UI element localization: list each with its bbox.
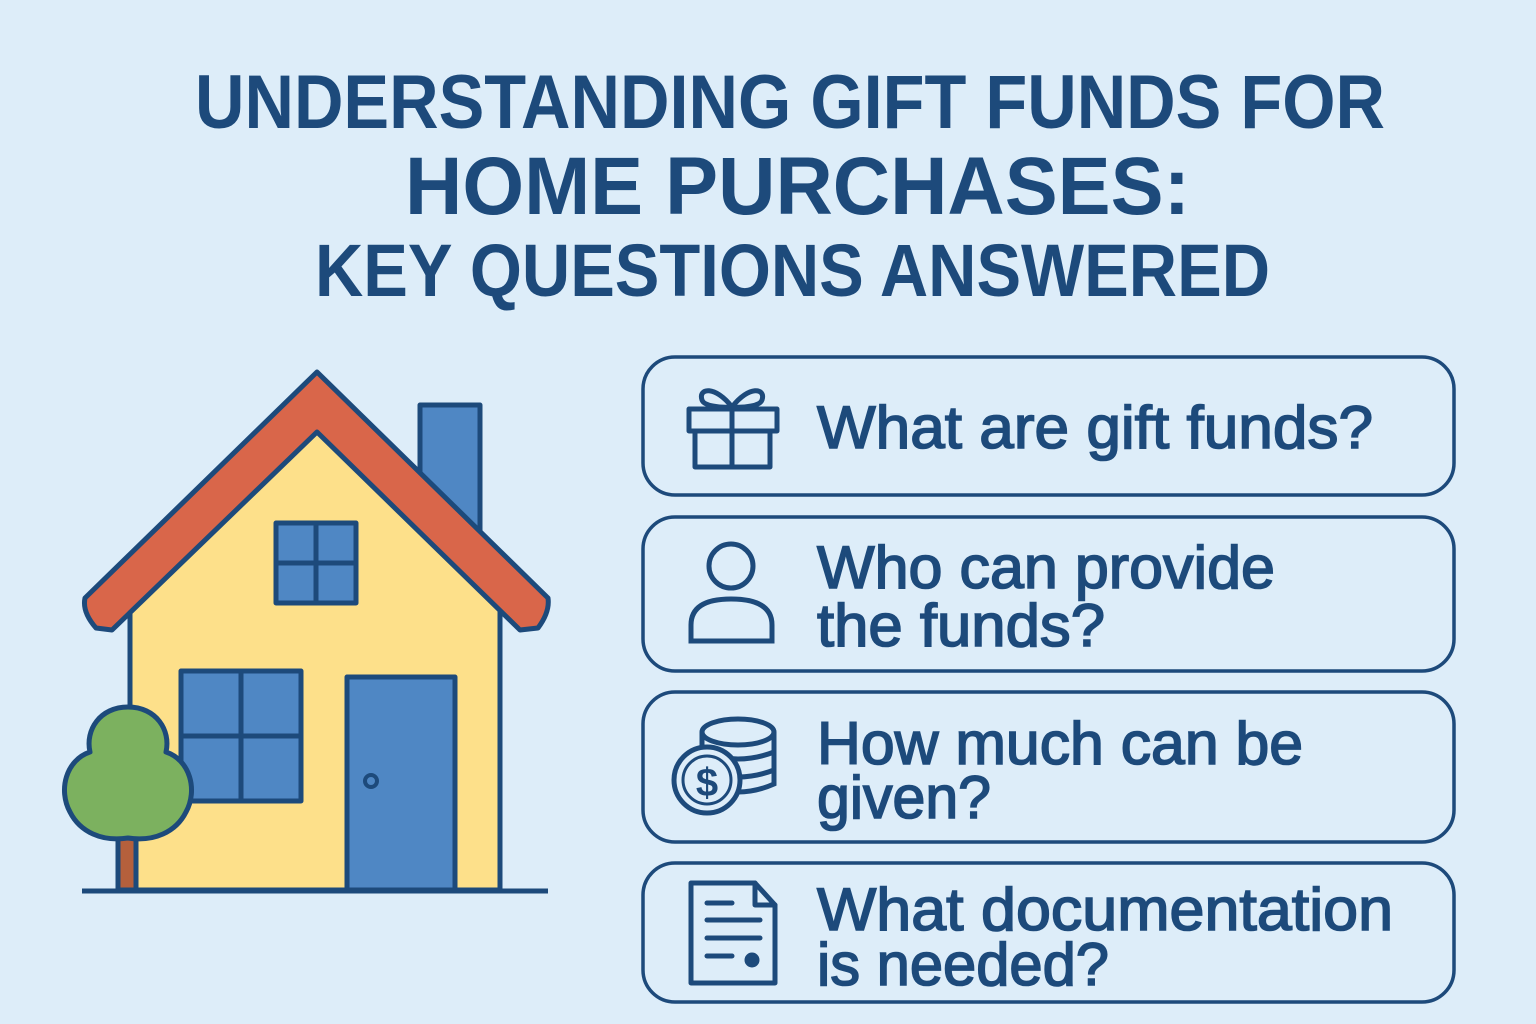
card 4: documentation — [643, 863, 1454, 1002]
title — [195, 60, 1385, 312]
tree — [64, 707, 192, 890]
top window — [276, 523, 356, 603]
card 3: how much: given? — [817, 764, 991, 831]
big window — [181, 671, 301, 801]
card 1: what are gift funds: What are gift funds? — [817, 394, 1373, 461]
card 4: documentation: What documentation — [817, 876, 1393, 943]
card 3: how much — [643, 692, 1454, 842]
card 2: who can provide — [643, 517, 1454, 671]
card 3: how much: $ — [696, 761, 718, 805]
door — [347, 677, 455, 890]
card 3: how much: How much can be — [817, 710, 1303, 777]
ground — [82, 888, 548, 894]
card 1: what are gift funds — [643, 357, 1454, 495]
icon: coins — [674, 719, 774, 813]
icon: gift — [689, 391, 777, 467]
chimney — [420, 405, 480, 545]
house illustration — [64, 372, 548, 891]
card 2: who can provide: the funds? — [817, 592, 1105, 659]
card 4: documentation: is needed? — [817, 931, 1109, 998]
icon: document — [691, 883, 775, 983]
title: UNDERSTANDING GIFT FUNDS FOR — [195, 60, 1385, 145]
title: KEY QUESTIONS ANSWERED — [315, 229, 1270, 312]
wall — [130, 430, 500, 890]
title: HOME PURCHASES: — [405, 141, 1190, 232]
roof — [84, 372, 548, 630]
card 2: who can provide: Who can provide — [817, 534, 1275, 601]
icon: person — [691, 544, 772, 641]
